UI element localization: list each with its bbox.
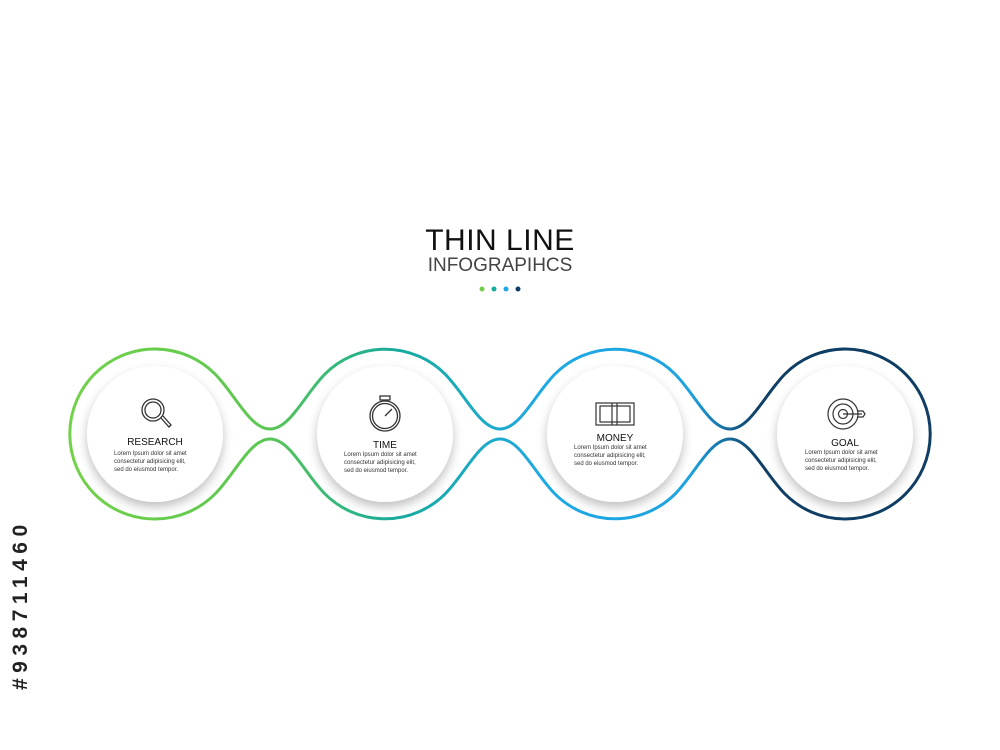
icon: banknotes <box>596 403 634 425</box>
circle: time: Lorem Ipsum dolor sit amet <box>344 452 417 458</box>
title: THIN LINE <box>425 224 575 257</box>
flowing line <box>70 349 930 519</box>
circle: time <box>317 366 453 502</box>
circle: time: sed do eiusmod tempor. <box>344 468 408 474</box>
dots <box>480 286 520 292</box>
circle: research: RESEARCH <box>127 437 183 448</box>
circle: goal: consectetur adipisicing elit, <box>805 458 877 464</box>
circle: research: consectetur adipisicing elit, <box>114 459 186 465</box>
circle: money: consectetur adipisicing elit, <box>574 453 646 459</box>
side id text: #938711460 <box>9 519 32 690</box>
circle: time: TIME <box>373 440 397 451</box>
icon: magnifier <box>142 399 171 427</box>
circle: research: sed do eiusmod tempor. <box>114 467 178 473</box>
circle: goal: sed do eiusmod tempor. <box>805 466 869 472</box>
circle: research: Lorem Ipsum dolor sit amet <box>114 451 187 457</box>
circle: research <box>87 366 223 502</box>
circle: money <box>547 366 683 502</box>
circle: money: sed do eiusmod tempor. <box>574 461 638 467</box>
subtitle: INFOGRAPIHCS <box>428 255 572 276</box>
circle: goal: Lorem Ipsum dolor sit amet <box>805 450 878 456</box>
circle: time: consectetur adipisicing elit, <box>344 460 416 466</box>
circle: goal <box>777 366 913 502</box>
icon: target <box>828 399 865 429</box>
icon: stopwatch <box>370 396 400 431</box>
circle: goal: GOAL <box>831 438 859 449</box>
circle: money: MONEY <box>597 433 634 444</box>
circle: money: Lorem Ipsum dolor sit amet <box>574 445 647 451</box>
